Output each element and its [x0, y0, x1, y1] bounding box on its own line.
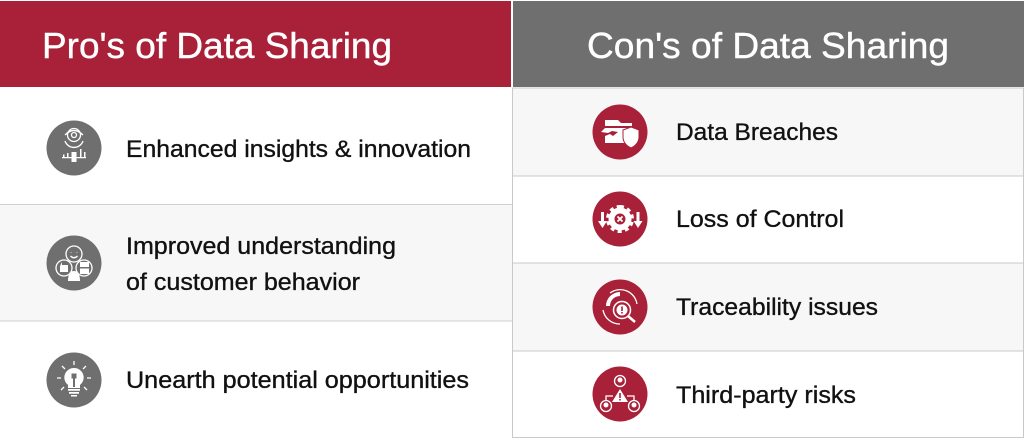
icon: data breach folder with shield — [592, 104, 648, 160]
text: enhanced insights: Enhanced insights & innovation — [126, 136, 471, 163]
icon: gear with cross and down arrows — [592, 192, 648, 246]
cons row 4 — [512, 351, 1024, 438]
text: improved understanding: of customer behavior — [126, 269, 360, 296]
pros row 3 — [46, 352, 469, 408]
text: third-party risks: Third-party risks — [676, 382, 856, 409]
text: traceability issues: Traceability issues — [676, 294, 878, 321]
cons header — [513, 1, 1024, 87]
pros header — [0, 1, 511, 87]
icon: gear and magnifier — [592, 280, 648, 334]
text: unearth opportunities: Unearth potential opportunities — [126, 367, 469, 394]
panel: pros — [0, 1, 512, 408]
text: improved understanding: Improved understanding — [126, 233, 396, 260]
text: data breaches: Data Breaches — [676, 119, 838, 146]
panel: cons — [512, 1, 1024, 438]
pros row 2 — [0, 204, 512, 321]
cons row 2 — [512, 176, 1024, 263]
cons row 3 — [512, 263, 1024, 351]
text: loss of control: Loss of Control — [676, 206, 844, 233]
pros header: Pro's of Data Sharing — [42, 25, 392, 66]
icon: eye over magnifier and chart — [46, 120, 102, 176]
text: improved understanding — [126, 233, 396, 296]
icon: third-party network with warning — [592, 366, 648, 422]
cons header: Con's of Data Sharing — [587, 25, 949, 66]
pros row 1 — [0, 87, 511, 205]
cons row 1 — [512, 88, 1024, 176]
icon: customer behavior — [46, 236, 102, 290]
icon: light bulb — [46, 352, 102, 408]
